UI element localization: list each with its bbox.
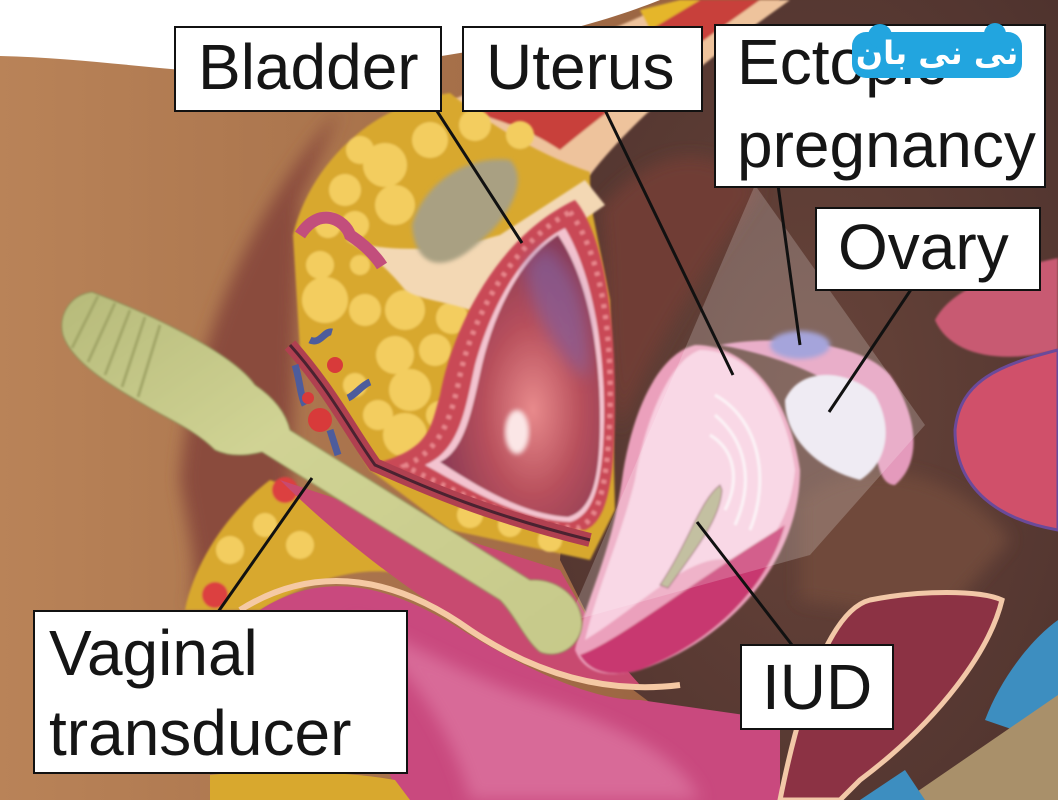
rectum — [240, 581, 780, 800]
label: Ectopic pregnancy — [714, 24, 1046, 188]
label: Ectopic pregnancy: Ectopic — [737, 26, 947, 98]
right side bowel loops — [780, 258, 1058, 800]
uterus — [575, 345, 800, 674]
label: Vaginal transducer: transducer — [49, 697, 351, 769]
watermark logo — [852, 23, 1022, 78]
label: Bladder — [174, 26, 442, 112]
lower fat and rectum wall — [185, 477, 440, 610]
connective tissue — [345, 180, 605, 310]
label: Ovary: Ovary — [838, 211, 1009, 283]
label: Ovary — [815, 207, 1041, 291]
blue and red vessels — [295, 332, 370, 455]
lower-left fat — [210, 772, 410, 800]
label: Vaginal transducer — [33, 610, 408, 774]
thigh shading — [180, 110, 340, 610]
fat area around bladder — [293, 93, 615, 560]
label: Uterus — [462, 26, 703, 112]
label: IUD — [740, 644, 894, 730]
top muscle strap — [430, 0, 790, 175]
label: IUD: IUD — [762, 651, 872, 723]
urethra — [290, 345, 590, 540]
pink vessel — [300, 218, 382, 266]
leader lines — [218, 108, 912, 645]
label: Vaginal transducer: Vaginal — [49, 617, 258, 689]
watermark logo: نی نی بان — [856, 34, 1018, 72]
label: Uterus: Uterus — [486, 31, 674, 103]
grey fat pad — [412, 159, 518, 263]
ultrasound beam — [568, 185, 925, 622]
label: Bladder: Bladder — [198, 31, 419, 103]
fallopian tube and ovary — [720, 331, 914, 485]
dark pelvic cavity — [560, 0, 1058, 800]
transducer — [62, 292, 582, 654]
bladder — [370, 200, 615, 530]
vaginal wall — [280, 480, 640, 686]
label: Ectopic pregnancy: pregnancy — [737, 109, 1036, 181]
